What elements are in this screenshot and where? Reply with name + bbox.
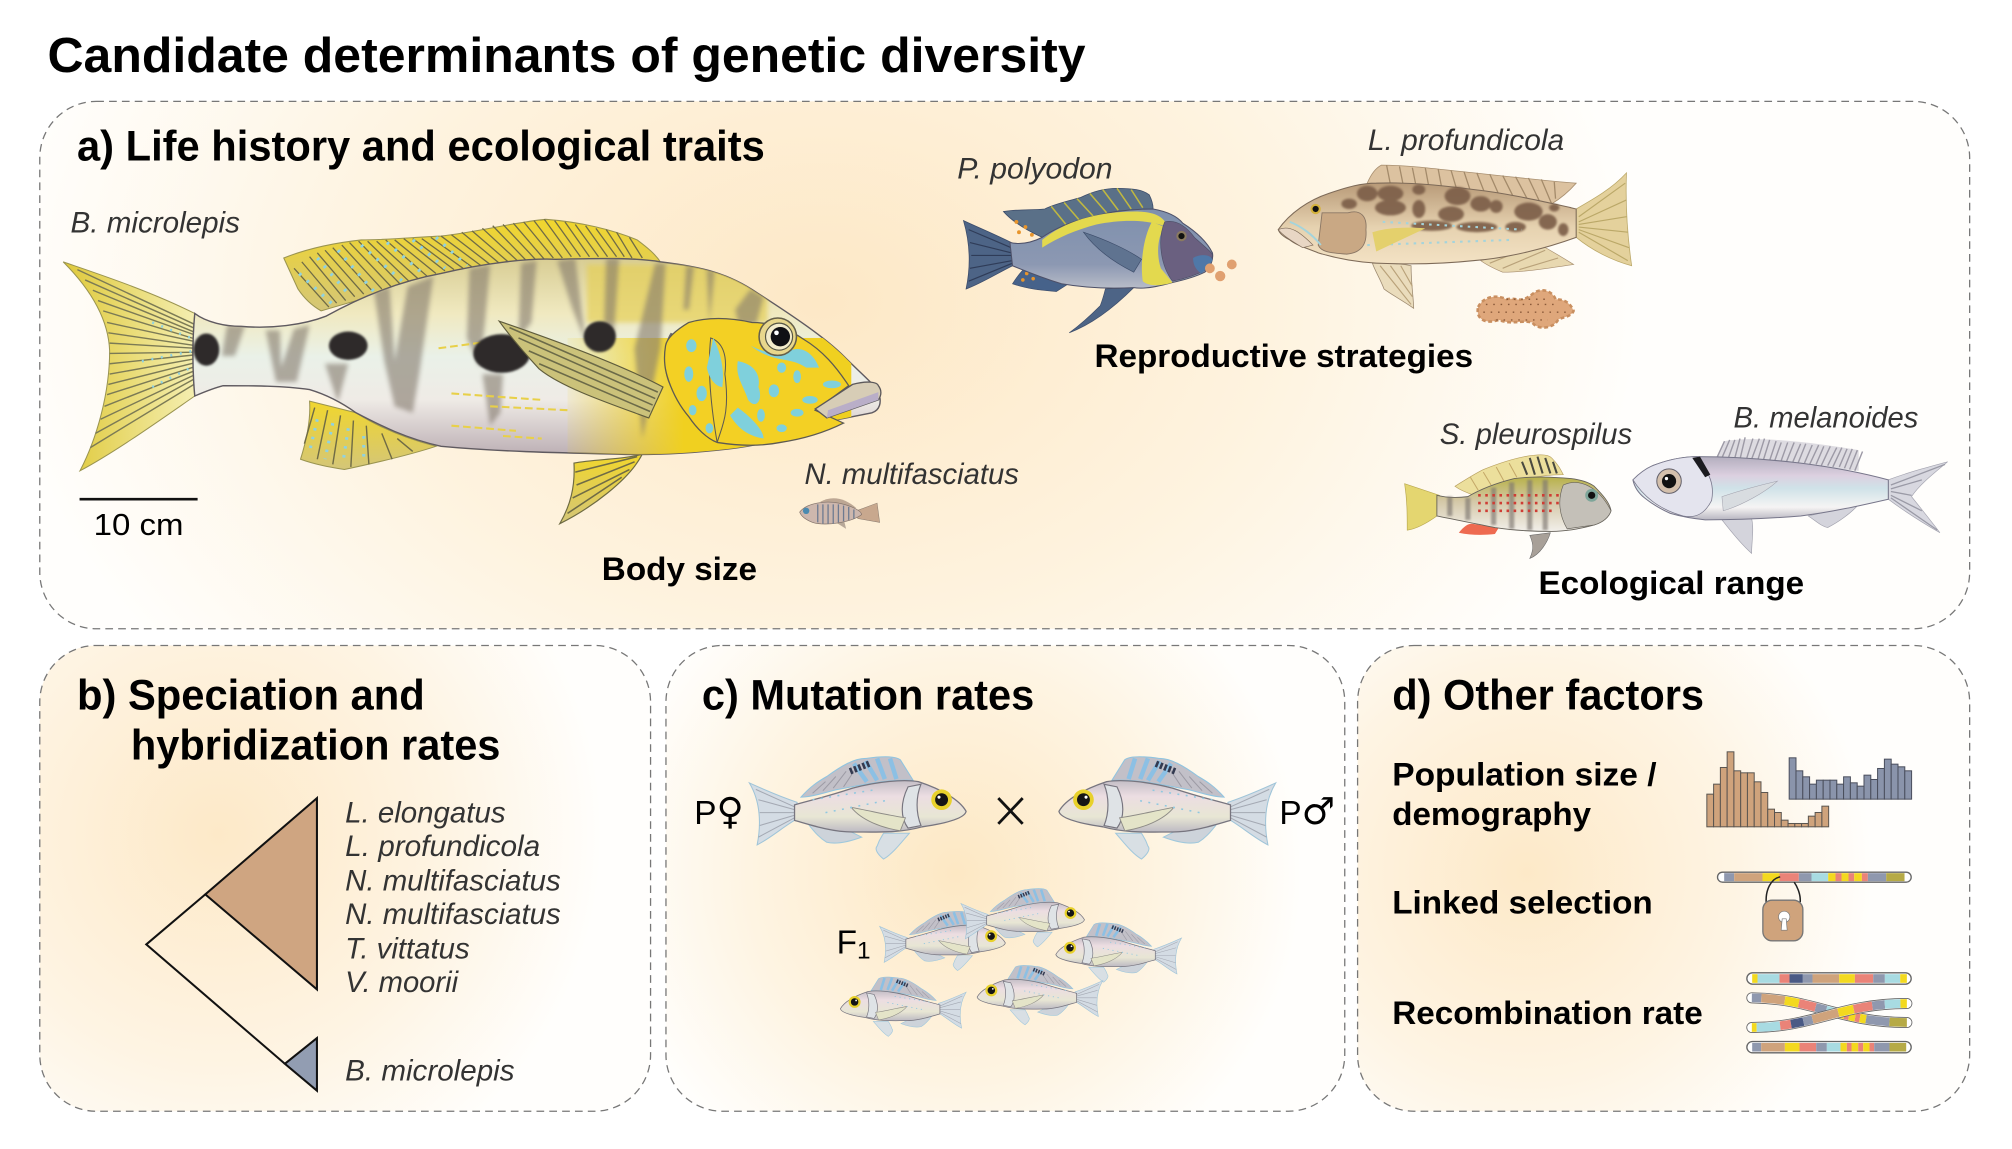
panel: a) life history and ecological traits (40, 101, 1970, 629)
label: Reproductive strategies: Reproductive strategies (1095, 338, 1473, 374)
chromosome: linked selection (1718, 872, 1911, 882)
label: population size / demography (1392, 756, 1657, 832)
label: B. melanoides: B. melanoides (1734, 401, 1919, 434)
chromosome: top (1747, 973, 1911, 984)
chart: blue demographic histogram (1789, 758, 1912, 799)
heading: c: c) Mutation rates (702, 672, 1034, 719)
species list: T. vittatus (345, 933, 470, 966)
chromosome: bottom (1747, 1042, 1911, 1053)
label: F1: 1 (857, 938, 871, 965)
fish body (193, 259, 880, 455)
species list: V. moorii (345, 966, 460, 999)
fish: B. microlepis (63, 219, 881, 524)
chromosomes: recombination (1747, 973, 1911, 1053)
fish: L. profundicola (1278, 165, 1632, 308)
heading: a: a) Life history and ecological traits (77, 122, 765, 169)
panel: c) mutation rates (666, 645, 1345, 1111)
label: F1: F (837, 924, 857, 961)
label: population size / demography: Population size / (1392, 756, 1657, 792)
species list: B. microlepis (345, 1054, 515, 1087)
chromosome: crossing strand rising (1752, 1004, 1907, 1028)
species list: N. multifasciatus (345, 898, 561, 931)
label: P female: P♀ (694, 789, 744, 833)
label: Body size: Body size (602, 551, 757, 587)
label: N. multifasciatus: N. multifasciatus (805, 458, 1019, 491)
label: linked selection: Linked selection (1392, 885, 1653, 921)
heading: b (77, 672, 500, 769)
icon: egg clutch (1478, 290, 1574, 328)
symbol: cross (998, 798, 1023, 824)
icon: padlock (1763, 877, 1803, 941)
species list: N. multifasciatus (345, 865, 561, 898)
panel: d) other factors (1358, 645, 1970, 1111)
label: S. pleurospilus: S. pleurospilus (1440, 418, 1632, 451)
species list: L. elongatus (345, 797, 506, 830)
scale bar: 10 cm (80, 499, 198, 542)
label: population size / demography: demography (1392, 796, 1591, 832)
label: B. microlepis: B. microlepis (71, 206, 240, 239)
species list: L. profundicola (345, 830, 540, 863)
fish group: F1 offspring (840, 889, 1181, 1036)
label: L. profundicola: L. profundicola (1368, 124, 1564, 157)
fish: P. polyodon (964, 188, 1213, 333)
label: P male: P♂ (1279, 789, 1335, 833)
fish: S. pleurospilus (1405, 455, 1611, 559)
phylogeny tree (146, 798, 317, 1091)
panel: b) speciation and hybridization rates (40, 645, 651, 1111)
icon: eggs (mouthbrooder) (1205, 260, 1237, 281)
chart: brown demographic histogram (1707, 752, 1829, 827)
scale bar: 10 cm: 10 cm (94, 507, 183, 542)
label: Ecological range: Ecological range (1539, 565, 1804, 601)
heading: b: b) Speciation and (77, 672, 425, 719)
label: recombination rate: Recombination rate (1392, 995, 1703, 1031)
heading: b: hybridization rates (131, 722, 500, 769)
fish: B. melanoides (1633, 437, 1948, 553)
chromosome: crossing strand falling (1752, 998, 1907, 1023)
species list (345, 797, 561, 1087)
title: Candidate determinants of genetic diversity (47, 29, 1086, 83)
label: P. polyodon: P. polyodon (957, 152, 1113, 185)
fish: female parent (749, 757, 966, 859)
fish: N. multifasciatus (800, 498, 880, 529)
fish: male parent (1059, 757, 1276, 859)
heading: d: d) Other factors (1392, 672, 1704, 719)
